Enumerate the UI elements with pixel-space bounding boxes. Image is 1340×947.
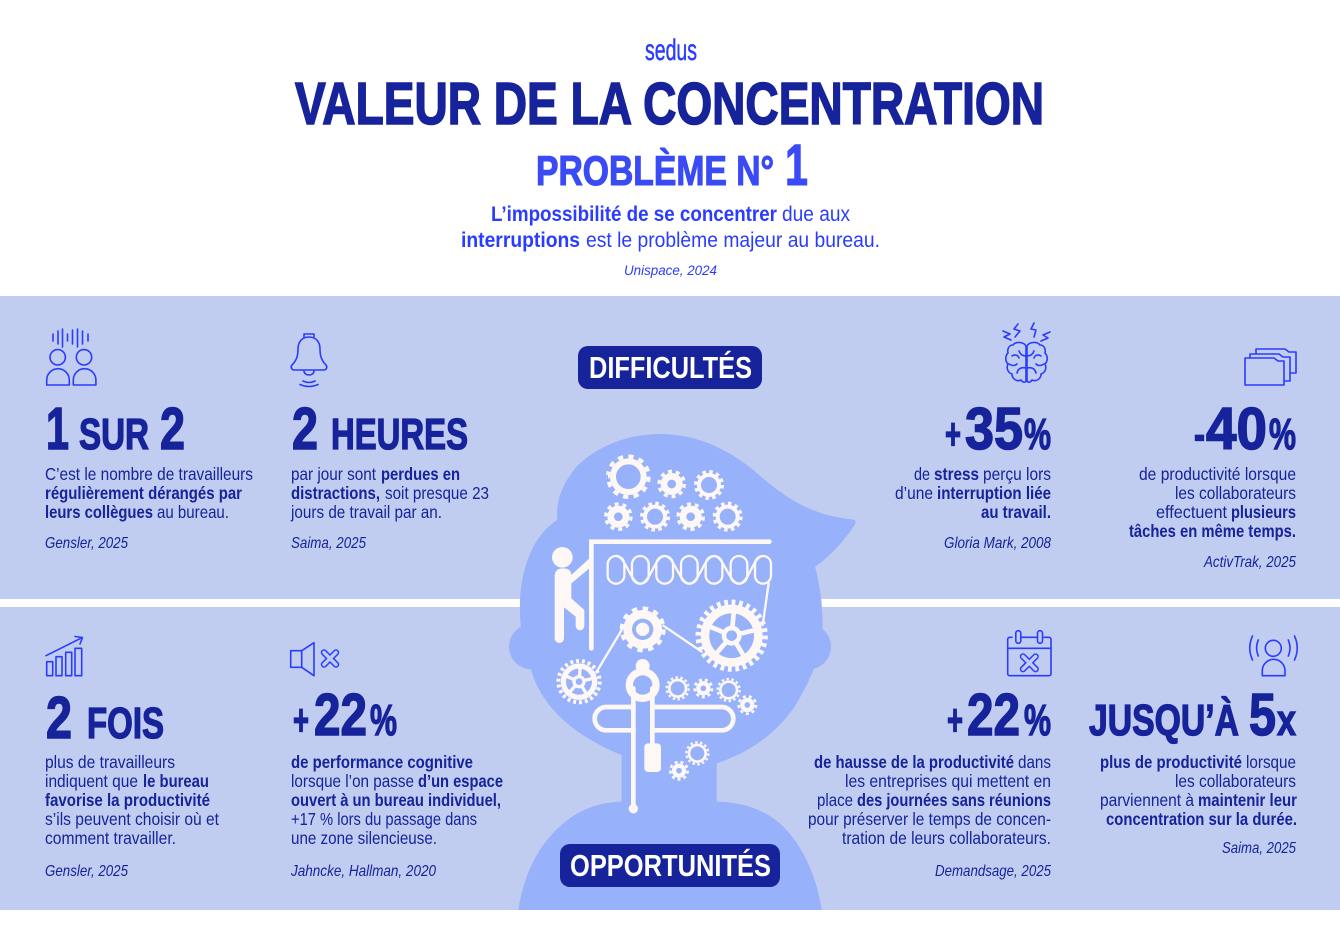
badge: difficultés bbox=[578, 346, 762, 389]
subtitle: problème n° 1: 1 bbox=[785, 133, 808, 198]
card: +22% productivité bbox=[808, 631, 1051, 880]
description: soit presque 23 bbox=[385, 483, 489, 503]
description: le bureau bbox=[143, 771, 209, 791]
stat: SUR bbox=[79, 411, 149, 459]
description: d’une bbox=[895, 483, 933, 503]
stat: 2 bbox=[46, 685, 72, 751]
description: ouvert à un bureau individuel, bbox=[291, 790, 501, 810]
description: lorsque l’on passe bbox=[291, 771, 414, 791]
description bbox=[290, 464, 489, 522]
stat: JUSQU’À bbox=[1089, 695, 1239, 745]
description: comment travailler. bbox=[45, 828, 176, 848]
stat: 35 bbox=[965, 396, 1023, 462]
description: une zone silencieuse. bbox=[291, 828, 437, 848]
description: les collaborateurs bbox=[1175, 483, 1296, 503]
stat: FOIS bbox=[87, 700, 164, 748]
card: +22% performance bbox=[290, 643, 503, 880]
stat: 22 bbox=[967, 682, 1020, 748]
subtitle: problème n° 1: PROBLÈME N° bbox=[536, 147, 774, 194]
medium gear bbox=[622, 608, 664, 650]
stat: HEURES bbox=[331, 411, 468, 459]
description: des journées sans réunions bbox=[857, 790, 1051, 810]
source: Gloria Mark, 2008 bbox=[944, 535, 1051, 552]
description bbox=[1129, 464, 1296, 541]
description: maintenir leur bbox=[1198, 790, 1297, 810]
stat: 1 bbox=[46, 396, 69, 462]
icon: muted speaker bbox=[291, 643, 336, 676]
description: tration de leurs collaborateurs. bbox=[842, 828, 1051, 848]
stat: - bbox=[1194, 411, 1205, 459]
description: jours de travail par an. bbox=[290, 502, 442, 522]
stat: 40 bbox=[1206, 396, 1267, 462]
description bbox=[45, 464, 253, 522]
source: Saima, 2025 bbox=[1222, 840, 1296, 857]
stat: % bbox=[1024, 697, 1051, 745]
icon: person with signal bbox=[1250, 636, 1297, 676]
description: favorise la productivité bbox=[45, 790, 210, 810]
description bbox=[808, 752, 1051, 848]
description: pour préserver le temps de concen- bbox=[808, 809, 1051, 829]
panel: difficultés background bbox=[0, 296, 1340, 599]
description: perçu lors bbox=[983, 464, 1051, 484]
climbing figure and frame bbox=[552, 542, 769, 648]
description: au bureau. bbox=[157, 502, 229, 522]
pendulum mechanism bbox=[595, 659, 733, 813]
stat: % bbox=[1269, 411, 1296, 459]
badge: opportunités bbox=[560, 844, 780, 887]
icon: brain with sparks bbox=[1003, 323, 1050, 382]
source: Unispace: Unispace, 2024 bbox=[624, 262, 717, 278]
description: tâches en même temps. bbox=[1129, 521, 1296, 541]
description bbox=[1100, 752, 1297, 829]
header bbox=[295, 34, 1044, 278]
gears: top cluster bbox=[606, 456, 741, 530]
small gears row bbox=[667, 677, 756, 779]
description: les collaborateurs bbox=[1175, 771, 1296, 791]
description: de productivité lorsque bbox=[1139, 464, 1296, 484]
description: de hausse de la productivité bbox=[814, 752, 1014, 772]
card: +35% bbox=[895, 323, 1051, 552]
description: indiquent que bbox=[45, 771, 138, 791]
badge: difficultés: DIFFICULTÉS bbox=[589, 350, 752, 385]
card: -40% bbox=[1129, 349, 1296, 571]
description: plusieurs bbox=[1231, 502, 1296, 522]
description: +17 % lors du passage dans bbox=[291, 809, 477, 829]
stat: + bbox=[945, 411, 961, 459]
description: stress bbox=[934, 464, 979, 484]
description: les entreprises qui mettent en bbox=[845, 771, 1051, 791]
icon: calendar with cross bbox=[1008, 631, 1051, 676]
description: leurs collègues bbox=[45, 502, 153, 522]
icon: rising bars bbox=[46, 636, 82, 676]
stat: 5 bbox=[1249, 682, 1276, 748]
icon: people and sound bbox=[47, 329, 96, 385]
source: Demandsage, 2025 bbox=[935, 863, 1051, 880]
description: interruption liée bbox=[937, 483, 1051, 503]
stat: 2 bbox=[292, 396, 318, 462]
intro text: L’impossibilité de se concentrer bbox=[491, 203, 777, 226]
source: ActivTrak, 2025 bbox=[1203, 554, 1296, 571]
stat: 2 bbox=[160, 396, 185, 462]
card: jusqu'à 5x bbox=[1089, 636, 1297, 857]
description: C’est le nombre de travailleurs bbox=[45, 464, 253, 484]
description: régulièrement dérangés par bbox=[45, 483, 242, 503]
badge: opportunités: OPPORTUNITÉS bbox=[570, 848, 771, 883]
description: par jour sont bbox=[291, 464, 376, 484]
intro text: est le problème majeur au bureau. bbox=[586, 229, 880, 252]
title: VALEUR DE LA CONCENTRATION bbox=[295, 71, 1044, 137]
head illustration bbox=[509, 434, 856, 910]
card: 2 fois bbox=[45, 636, 219, 880]
description: parviennent à bbox=[1100, 790, 1194, 810]
description: au travail. bbox=[981, 502, 1051, 522]
stat: x bbox=[1277, 697, 1296, 745]
icon: folders bbox=[1245, 349, 1296, 385]
intro text: due aux bbox=[782, 203, 850, 226]
description bbox=[895, 464, 1051, 522]
description: plus de travailleurs bbox=[45, 752, 175, 772]
description bbox=[45, 752, 219, 848]
coil bbox=[608, 556, 771, 584]
description: effectuent bbox=[1156, 502, 1227, 522]
description: dans bbox=[1018, 752, 1051, 772]
source: Gensler, 2025 bbox=[45, 863, 128, 880]
stat: + bbox=[947, 697, 963, 745]
panel: opportunités background bbox=[0, 607, 1340, 910]
description: perdues en bbox=[381, 464, 460, 484]
card: 2 heures bbox=[290, 334, 489, 552]
stat: % bbox=[370, 697, 397, 745]
small spoked gear bbox=[558, 661, 600, 702]
source: Jahncke, Hallman, 2020 bbox=[290, 863, 436, 880]
source: Saima, 2025 bbox=[291, 535, 366, 552]
description: d’un espace bbox=[418, 771, 503, 791]
head silhouette bbox=[509, 434, 856, 910]
belts bbox=[597, 583, 769, 672]
large spoked gear bbox=[698, 602, 765, 669]
stat: 22 bbox=[314, 682, 367, 748]
description: distractions, bbox=[291, 483, 380, 503]
description bbox=[291, 752, 503, 848]
intro text bbox=[461, 203, 880, 252]
source: Gensler, 2025 bbox=[45, 535, 128, 552]
description: s’ils peuvent choisir où et bbox=[45, 809, 219, 829]
logo: sedus: sedus bbox=[645, 34, 697, 67]
description: concentration sur la durée. bbox=[1106, 809, 1297, 829]
description: de bbox=[914, 464, 930, 484]
card: 1 sur 2 bbox=[45, 329, 253, 552]
intro text: interruptions bbox=[461, 229, 580, 252]
stat: + bbox=[293, 697, 309, 745]
description: plus de productivité bbox=[1100, 752, 1242, 772]
description: lorsque bbox=[1246, 752, 1296, 772]
icon: bell bbox=[291, 334, 327, 386]
description: place bbox=[817, 790, 853, 810]
description: de performance cognitive bbox=[291, 752, 473, 772]
stat: % bbox=[1024, 411, 1051, 459]
